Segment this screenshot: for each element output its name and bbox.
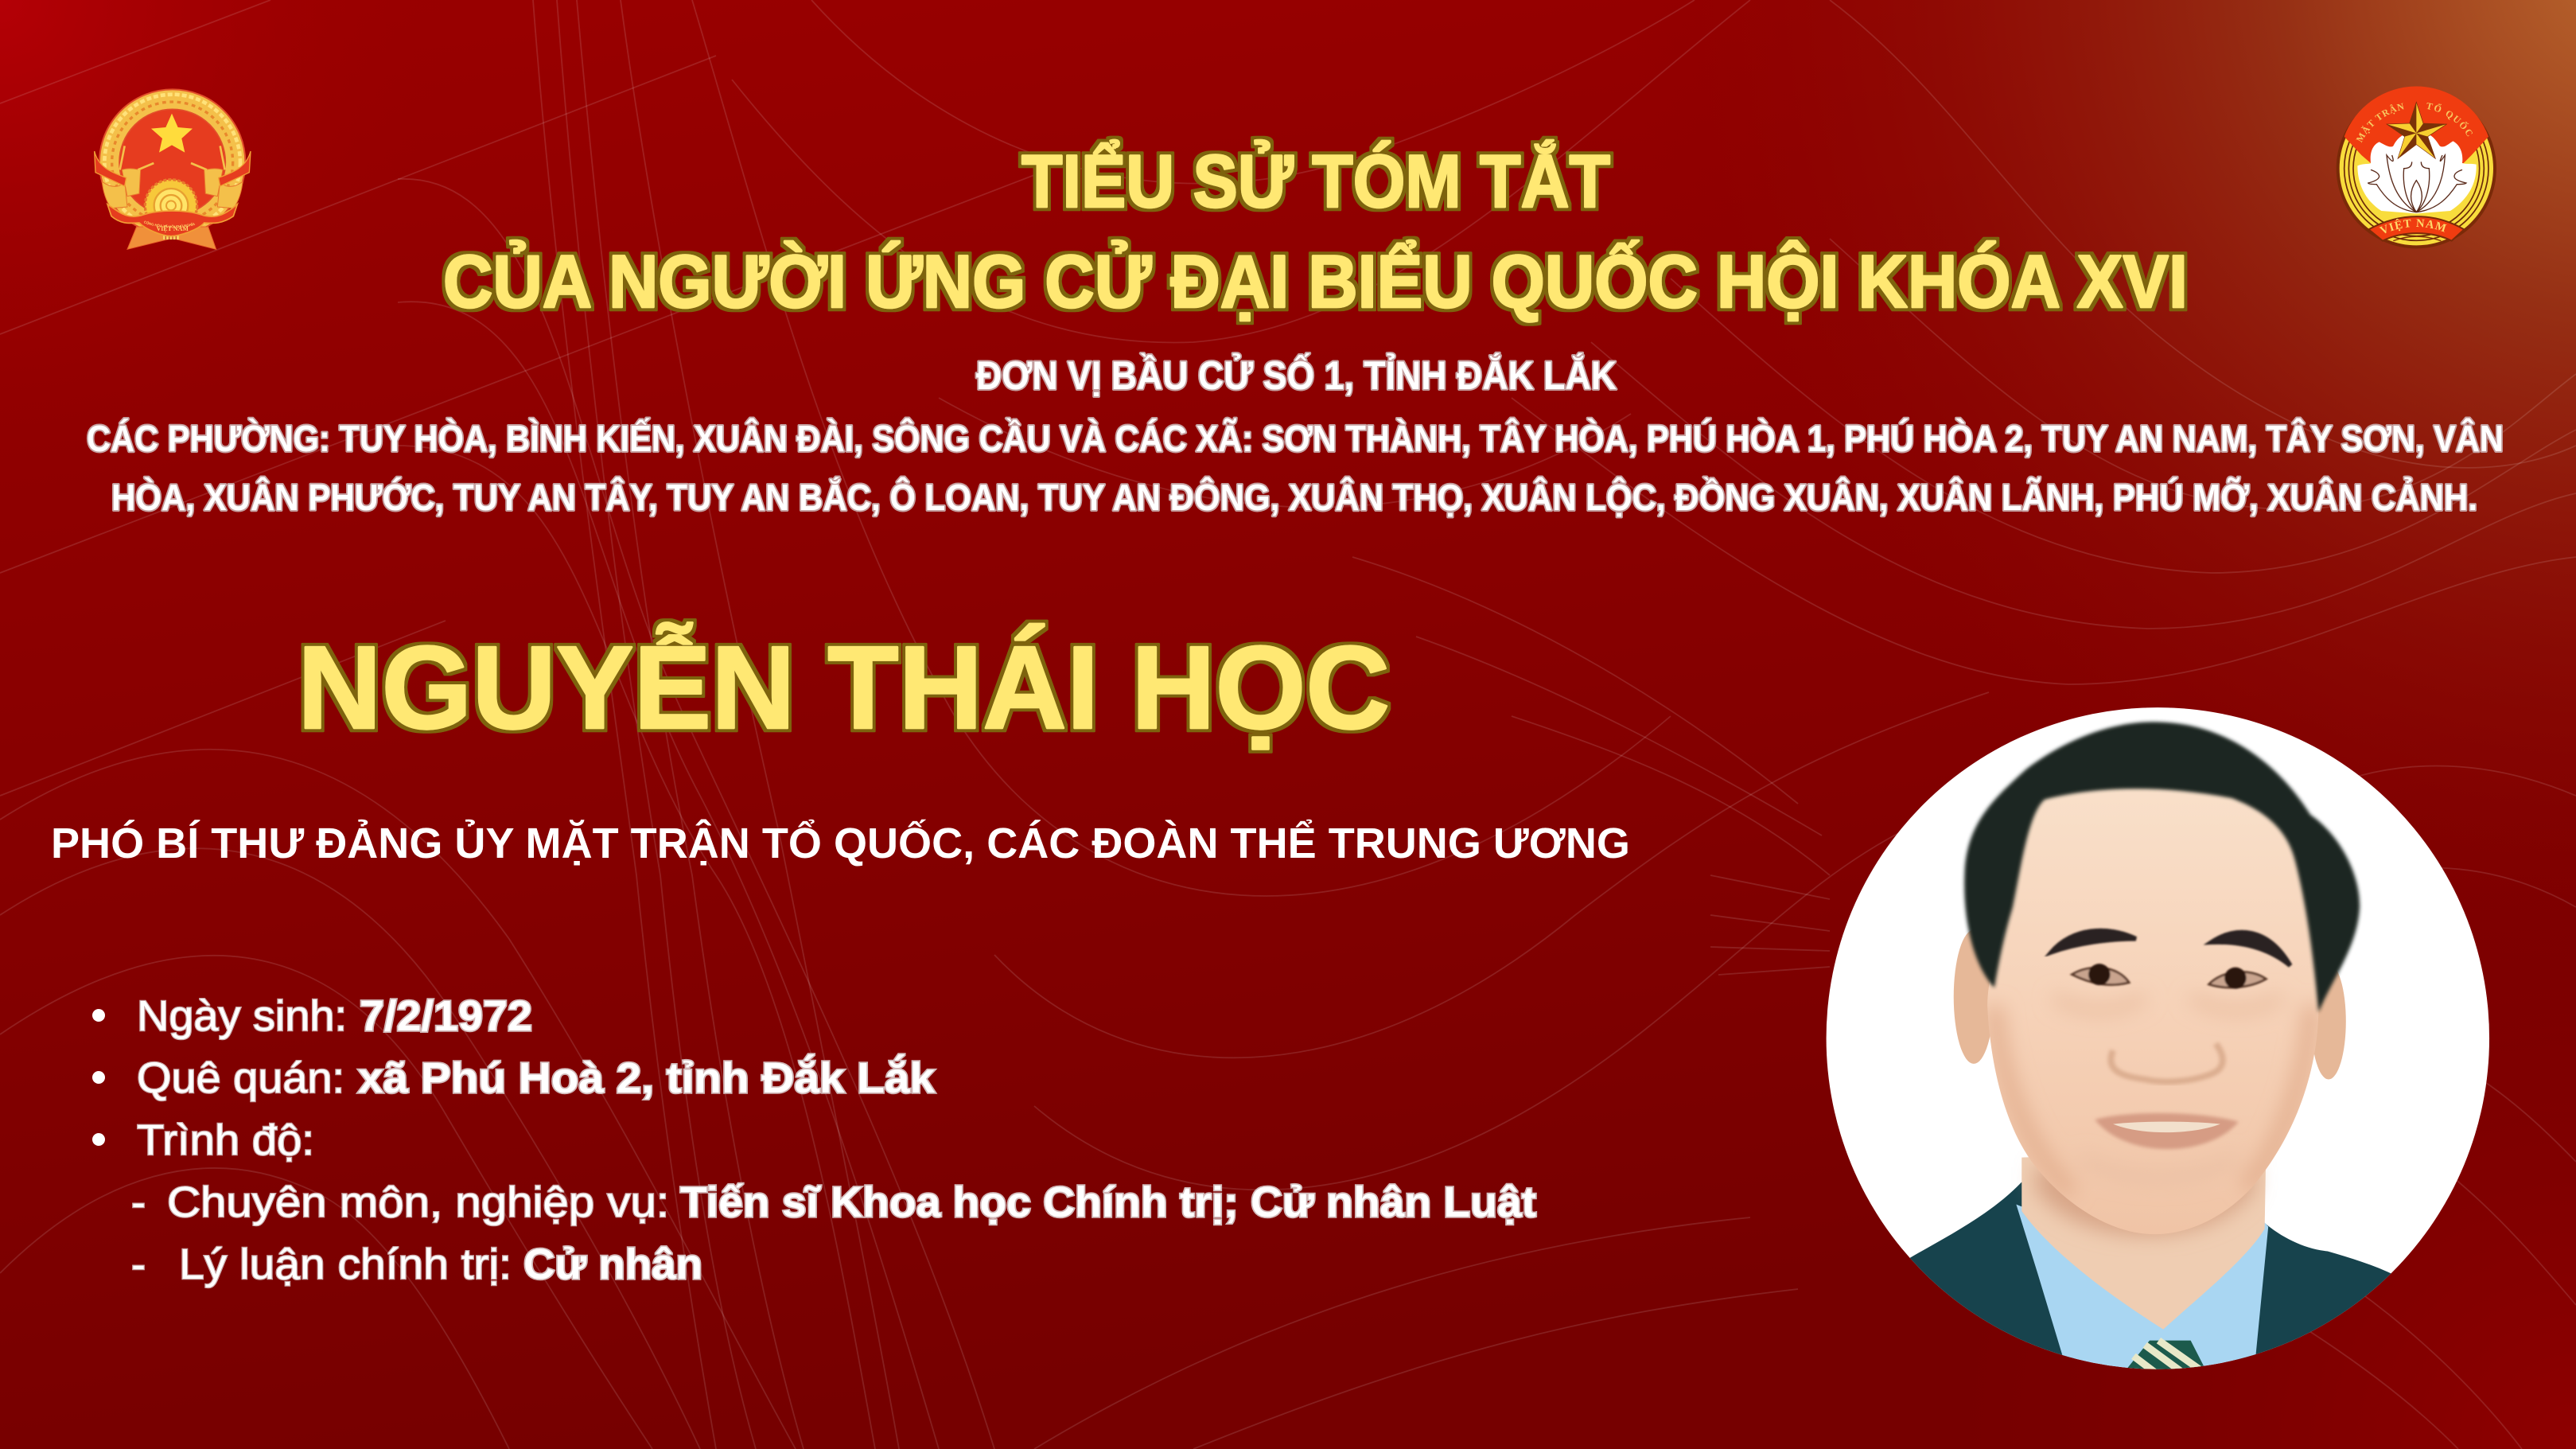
lotus [2357,135,2477,213]
portrait photo [1827,707,2489,1381]
political theory [131,1241,702,1288]
icon: Fatherland Front emblem: TỔ QUỐC [2426,102,2473,137]
professional qualification: Chuyên môn, nghiệp vụ: [167,1178,669,1226]
candidate name: NGUYỄN THÁI HỌC [298,622,1390,754]
professional qualification [131,1178,1536,1226]
birth date: 7/2/1972 [360,992,532,1040]
title: CỦA NGƯỜI ỨNG CỬ ĐẠI BIỂU QUỐC HỘI KHÓA XVI [443,240,2188,323]
star [2387,102,2446,158]
icon: Fatherland Front emblem: MẶT TRẬN [2356,103,2404,143]
political theory: Cử nhân [523,1241,702,1288]
tie [2127,1340,2204,1369]
banner [2368,216,2464,241]
hair [1964,722,2360,1012]
base [127,227,216,249]
constituency wards and communes [87,418,2504,518]
icon: national emblem of Vietnam: CỘNG HÒA XÃ HỘI CHỦ NGHĨA [144,221,196,229]
title: TIỂU SỬ TÓM TẮT [1021,138,1610,223]
shirt [2016,1205,2268,1372]
title [443,138,2188,323]
icon: national emblem of Vietnam: VIỆT NAM [156,225,189,232]
icon: Fatherland Front emblem: VIỆT NAM [2379,218,2447,234]
eyes [2072,964,2266,989]
red top [2344,87,2488,163]
biography list [92,992,1536,1288]
political theory: - [131,1241,146,1288]
education: Trình độ: [137,1116,314,1164]
icon: national emblem of Vietnam [94,88,251,250]
professional qualification: Tiến sĩ Khoa học Chính trị; Cử nhân Luật [680,1178,1536,1226]
political theory: Lý luận chính trị: [179,1241,512,1288]
professional qualification: - [131,1178,146,1226]
face [1987,783,2318,1234]
constituency heading: ĐƠN VỊ BẦU CỬ SỐ 1, TỈNH ĐẮK LẮK [976,353,1617,398]
ribbons [95,151,126,186]
hometown: xã Phú Hoà 2, tỉnh Đắk Lắk [358,1054,936,1102]
mouth [2095,1113,2239,1149]
hometown [92,1054,936,1102]
birth date: Ngày sinh: [137,992,347,1040]
suit [1909,1182,2391,1360]
icon: Fatherland Front emblem [2336,86,2496,248]
hometown: Quê quán: [137,1054,344,1102]
birth date [92,992,532,1040]
ears [1954,930,1994,1064]
cogwheel [145,180,197,232]
wheat [102,181,127,208]
eyebrows [2052,931,2136,952]
candidate position: PHÓ BÍ THƯ ĐẢNG ỦY MẶT TRẬN TỔ QUỐC, CÁC ĐOÀN THỂ TRUNG ƯƠNG [51,819,1630,867]
nose [2111,1044,2223,1081]
face shading [1994,997,2312,1194]
banner [107,204,237,236]
star [151,114,193,153]
neck [2021,1148,2266,1330]
